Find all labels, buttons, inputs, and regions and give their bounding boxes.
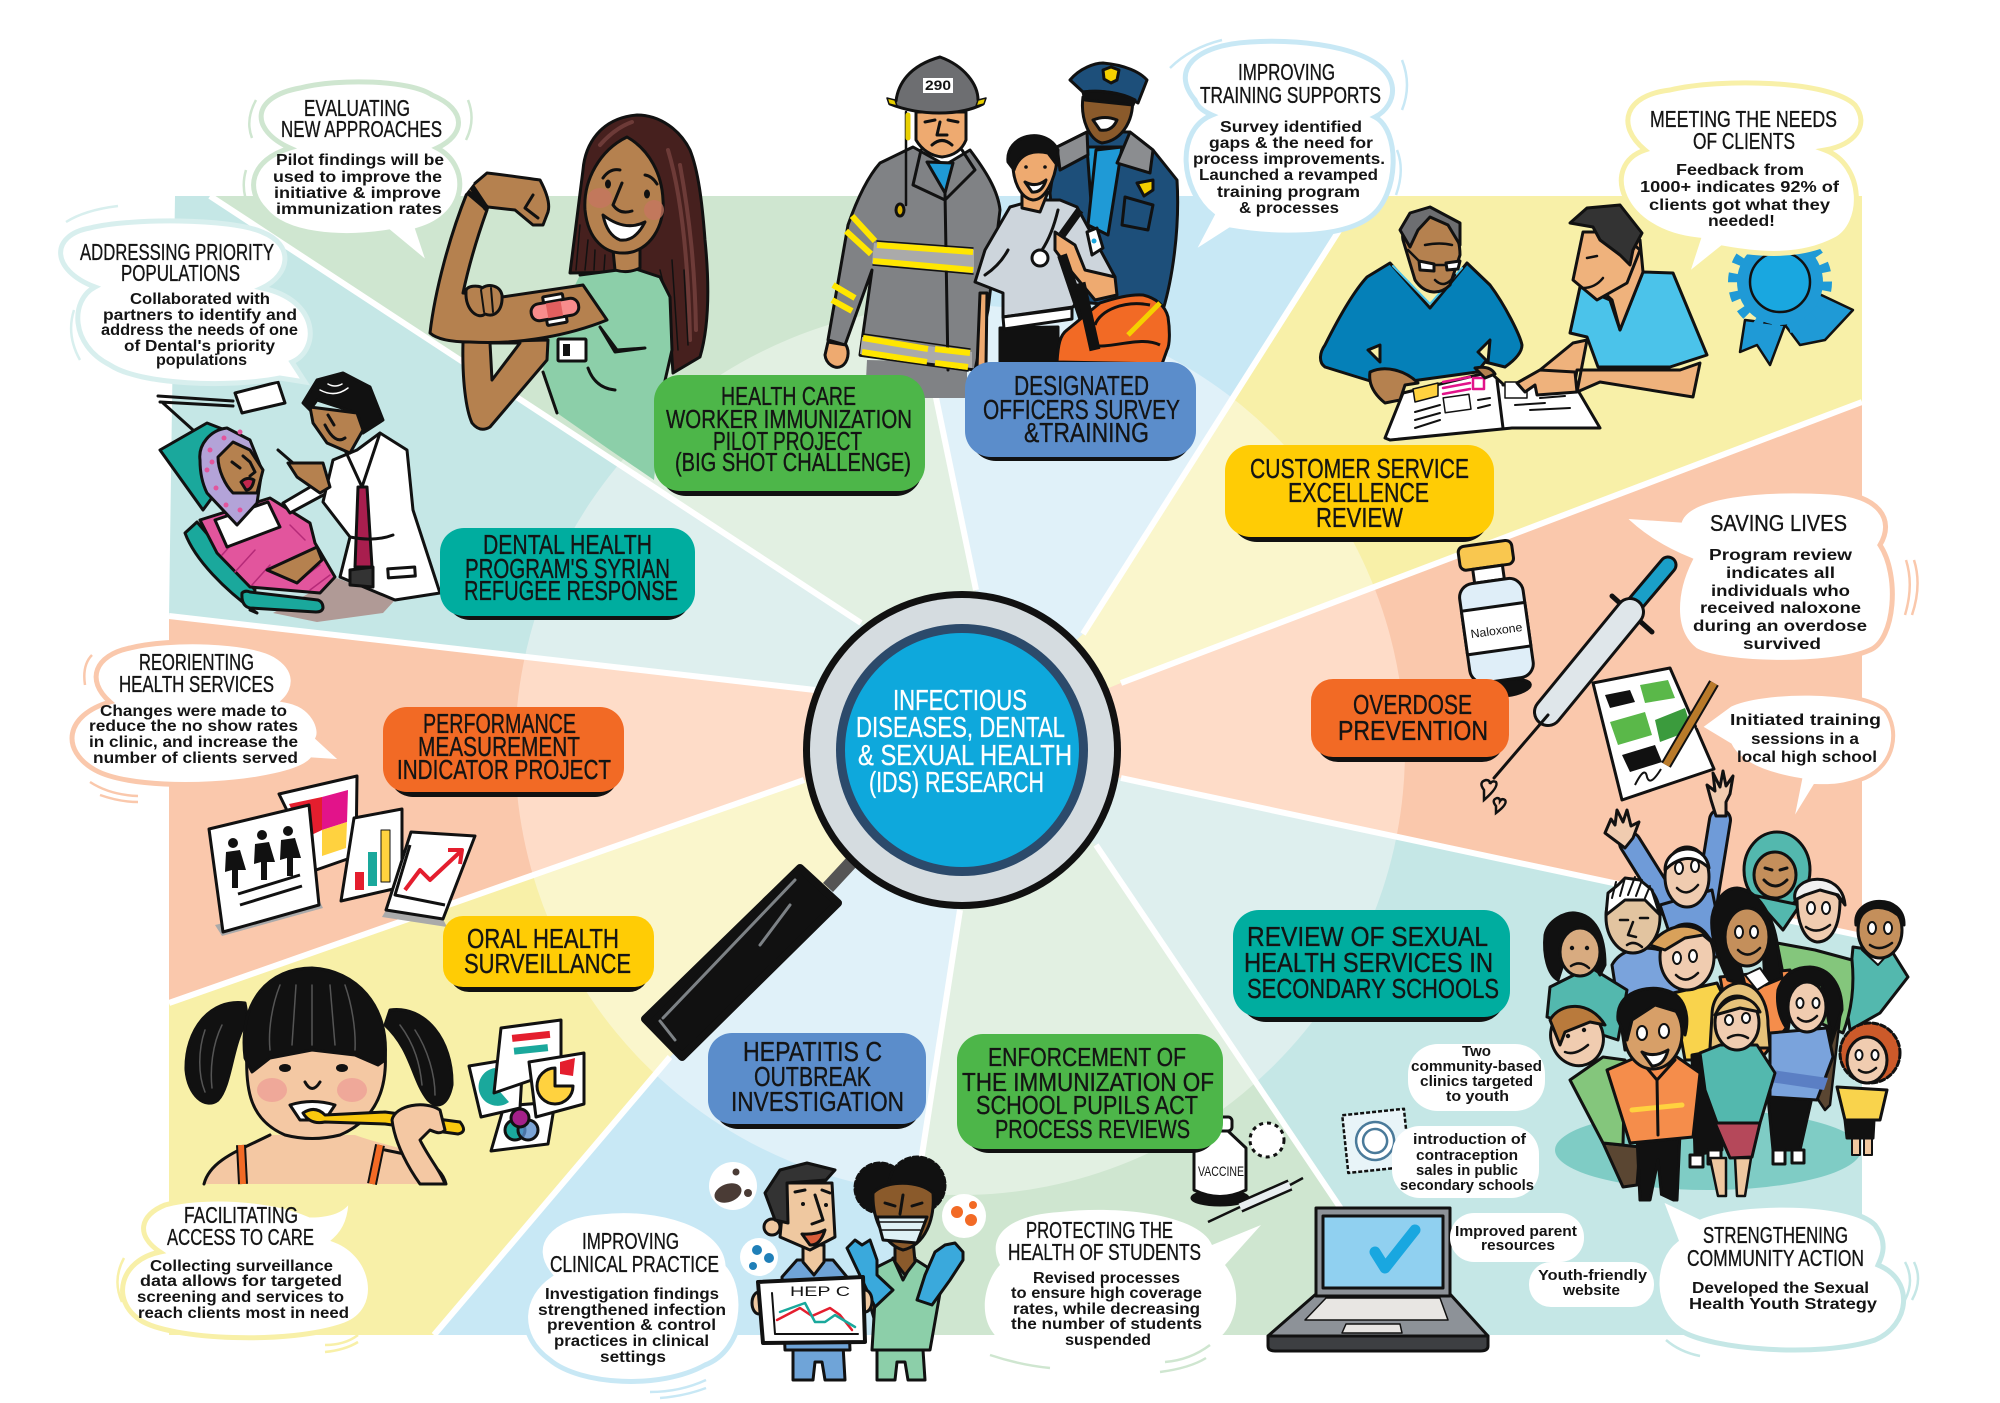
speech bubble: improving clinical practice: Investigation findings [545, 1286, 719, 1303]
speech bubble: strengthening community action: COMMUNITY ACTION [1687, 1245, 1864, 1271]
label: designated officers survey: &TRAINING [1024, 417, 1149, 448]
label: health care worker immunization: WORKER IMMUNIZATION [666, 406, 912, 434]
speech bubble: initiated training sessions: local high school [1737, 749, 1877, 766]
speech bubble: strengthening community action: Developed the Sexual [1692, 1280, 1869, 1297]
magnifying glass [645, 591, 1121, 1057]
speech bubble: meeting the needs of clients: clients got what they [1649, 197, 1830, 214]
speech bubble: addressing priority populations [61, 206, 310, 384]
illustration: oral health survey documents [469, 1020, 584, 1151]
label: review of sexual health services [1233, 910, 1510, 1022]
note: youth-friendly website [1529, 1262, 1654, 1307]
speech bubble: strengthening community action: STRENGTHENING [1703, 1222, 1848, 1248]
note: community-based clinics: community-based [1411, 1059, 1542, 1075]
icon: blue award ribbon [1733, 235, 1853, 365]
note: community-based clinics: to youth [1446, 1089, 1509, 1105]
illustration: signed training document with pencil [1593, 668, 1714, 800]
label: performance measurement [383, 707, 624, 797]
speech bubble: saving lives: survived [1743, 636, 1821, 653]
note: community-based clinics: Two [1462, 1044, 1491, 1060]
speech bubble: improving training supports: Launched a revamped [1199, 167, 1378, 184]
speech bubble: facilitating access to care: screening and services to [137, 1289, 344, 1306]
illustration: paramedic [975, 136, 1117, 367]
speech bubble: protecting the health of students: the number of students [1011, 1316, 1202, 1333]
label: health care worker immunization [654, 375, 925, 496]
speech bubble: improving clinical practice: practices in clinical [554, 1333, 709, 1350]
speech bubble: improving clinical practice: strengthened infection [538, 1302, 726, 1319]
note: community-based clinics: clinics targeted [1420, 1074, 1533, 1090]
illustration: naloxone bottle: Naloxone [1470, 620, 1523, 641]
illustration: hepatitis C health workers with chart: HEP C [790, 1283, 850, 1299]
label: hepatitis C outbreak: INVESTIGATION [731, 1086, 904, 1117]
heading: central title [856, 685, 1072, 799]
label: customer service excellence: EXCELLENCE [1288, 477, 1429, 508]
label: designated officers survey: OFFICERS SURVEY [983, 394, 1180, 425]
speech bubble: initiated training sessions: Initiated training [1730, 712, 1881, 729]
speech bubble: reorienting health services: HEALTH SERVICES [119, 671, 274, 697]
label: enforcement of immunization act: SCHOOL PUPILS ACT [976, 1092, 1198, 1120]
speech bubble: addressing priority populations: ADDRESSING PRIORITY [80, 239, 274, 265]
icon: condom packet [1342, 1109, 1410, 1173]
heading: central title: (IDS) RESEARCH [869, 767, 1044, 799]
speech bubble: reorienting health services: number of clients served [93, 750, 298, 767]
label: enforcement of immunization act: PROCESS REVIEWS [995, 1116, 1190, 1144]
label: enforcement of immunization act: ENFORCEMENT OF [988, 1044, 1186, 1072]
label: customer service excellence: REVIEW [1316, 502, 1403, 533]
illustration: naloxone syringe [1481, 565, 1668, 813]
speech bubble: facilitating access to care: FACILITATING [184, 1202, 298, 1228]
heading: central title: DISEASES, DENTAL [856, 712, 1065, 744]
illustration: nurse flexing arm with bandage [430, 115, 708, 480]
speech bubble: facilitating access to care: Collecting surveillance [150, 1258, 333, 1275]
speech bubble: evaluating new approaches: NEW APPROACHES [281, 116, 442, 142]
illustration: vaccine bottle and syringe: VACCINE [1198, 1163, 1244, 1179]
note: contraception sales [1392, 1126, 1539, 1198]
speech bubble: improving clinical practice: IMPROVING [582, 1228, 679, 1254]
speech bubble: improving training supports [1170, 40, 1407, 255]
speech bubble: improving training supports: & processes [1239, 200, 1339, 217]
label: hepatitis C outbreak [708, 1033, 926, 1129]
label: dental refugee response: REFUGEE RESPONSE [464, 575, 678, 606]
note: improved parent resources [1450, 1213, 1584, 1262]
speech bubble: evaluating new approaches: used to improve the [273, 169, 442, 186]
note: community-based clinics [1408, 1044, 1545, 1111]
label: enforcement of immunization act [957, 1034, 1223, 1153]
speech bubble: addressing priority populations: address the needs of one [101, 322, 298, 339]
speech bubble: protecting the health of students: HEALTH OF STUDENTS [1008, 1239, 1201, 1265]
label: health care worker immunization: (BIG SHOT CHALLENGE) [675, 449, 911, 477]
speech bubble: initiated training sessions: sessions in a [1751, 731, 1859, 748]
speech bubble: evaluating new approaches: Pilot findings will be [276, 152, 444, 169]
label: overdose prevention: PREVENTION [1338, 715, 1488, 746]
speech bubble: initiated training sessions [1700, 694, 1893, 825]
illustration: dentist treating patient [158, 373, 440, 622]
label: health care worker immunization: PILOT PROJECT [713, 428, 862, 456]
speech bubble: evaluating new approaches: EVALUATING [304, 95, 410, 121]
speech bubble: saving lives [1622, 491, 1918, 662]
label: overdose prevention: OVERDOSE [1353, 689, 1472, 720]
speech bubble: reorienting health services: REORIENTING [139, 649, 254, 675]
speech bubble: strengthening community action [1657, 1198, 1918, 1356]
speech bubble: improving clinical practice: settings [600, 1349, 666, 1366]
label: performance measurement: INDICATOR PROJECT [397, 754, 611, 785]
label: dental refugee response: PROGRAM'S SYRIAN [465, 553, 670, 584]
illustration: police officer [1050, 63, 1178, 310]
illustration: laptop with checkmark [1268, 1208, 1488, 1351]
speech bubble: protecting the health of students: PROTECTING THE [1026, 1217, 1173, 1243]
illustration: crowd of community members [1543, 771, 1908, 1200]
label: dental refugee response [440, 528, 695, 620]
speech bubble: improving clinical practice: prevention & control [547, 1317, 716, 1334]
label: oral health surveillance: SURVEILLANCE [464, 948, 631, 979]
label: health care worker immunization: HEALTH CARE [721, 383, 856, 411]
speech bubble: reorienting health services [72, 642, 344, 802]
illustration: firefighter: 290 [925, 77, 951, 93]
label: hepatitis C outbreak: OUTBREAK [754, 1061, 871, 1092]
illustration: orange medical bag [1057, 283, 1169, 364]
speech bubble: improving training supports: Survey identified [1220, 119, 1362, 136]
illustration: vaccine bottle and syringe [1192, 1117, 1303, 1222]
label: hepatitis C outbreak: HEPATITIS C [743, 1036, 882, 1067]
speech bubble: protecting the health of students [985, 1210, 1261, 1372]
speech bubble: addressing priority populations: POPULATIONS [121, 260, 240, 286]
speech bubble: addressing priority populations: of Dental's priority [124, 338, 275, 355]
illustration: performance measurement documents [209, 776, 475, 936]
note: contraception sales: secondary schools [1400, 1178, 1534, 1194]
label: review of sexual health services: HEALTH SERVICES IN [1244, 947, 1493, 978]
speech bubble: meeting the needs of clients [1621, 83, 1861, 277]
panel: radial wedge background [169, 196, 1862, 1335]
speech bubble: improving training supports: process improvements. [1193, 151, 1385, 168]
speech bubble: evaluating new approaches: immunization rates [276, 201, 442, 218]
illustration: girl brushing teeth [186, 968, 464, 1184]
speech bubble: protecting the health of students: to ensure high coverage [1011, 1285, 1202, 1302]
note: improved parent resources: resources [1481, 1238, 1555, 1254]
note: youth-friendly website: Youth-friendly [1538, 1268, 1647, 1284]
label: customer service excellence: CUSTOMER SERVICE [1250, 453, 1469, 484]
speech bubble: improving training supports: training program [1217, 184, 1360, 201]
illustration: two men reading a report [1320, 205, 1707, 440]
speech bubble: meeting the needs of clients: 1000+ indicates 92% of [1640, 179, 1840, 196]
speech bubble: improving clinical practice [526, 1211, 741, 1398]
speech bubble: meeting the needs of clients: OF CLIENTS [1693, 128, 1795, 154]
label: review of sexual health services: REVIEW OF SEXUAL [1247, 921, 1488, 952]
speech bubble: addressing priority populations: Collaborated with [130, 291, 270, 308]
label: enforcement of immunization act: THE IMMUNIZATION OF [962, 1069, 1214, 1097]
speech bubble: facilitating access to care: reach clients most in need [138, 1305, 349, 1322]
speech bubble: strengthening community action: Health Youth Strategy [1689, 1296, 1877, 1313]
note: contraception sales: introduction of [1413, 1132, 1526, 1148]
speech bubble: meeting the needs of clients: Feedback from [1676, 162, 1804, 179]
speech bubble: improving training supports: gaps & the need for [1209, 135, 1373, 152]
speech bubble: meeting the needs of clients: MEETING THE NEEDS [1650, 106, 1837, 132]
label: dental refugee response: DENTAL HEALTH [483, 529, 652, 560]
label: oral health surveillance: ORAL HEALTH [467, 923, 619, 954]
note: contraception sales: contraception [1416, 1148, 1518, 1164]
speech bubble: saving lives: during an overdose [1693, 618, 1867, 635]
speech bubble: reorienting health services: reduce the no show rates [89, 718, 298, 735]
illustration: firefighter [825, 57, 1000, 398]
speech bubble: protecting the health of students: rates, while decreasing [1013, 1301, 1200, 1318]
speech bubble: addressing priority populations: partners to identify and [103, 307, 297, 324]
note: contraception sales: sales in public [1416, 1163, 1518, 1179]
speech bubble: reorienting health services: in clinic, and increase the [89, 734, 298, 751]
label: designated officers survey [965, 362, 1196, 461]
speech bubble: facilitating access to care [117, 1195, 370, 1352]
speech bubble: evaluating new approaches [244, 82, 472, 266]
speech bubble: improving training supports: TRAINING SUPPORTS [1200, 82, 1381, 108]
label: performance measurement: PERFORMANCE [423, 708, 576, 739]
speech bubble: evaluating new approaches: initiative & improve [274, 185, 441, 202]
speech bubble: meeting the needs of clients: needed! [1708, 213, 1775, 230]
speech bubble: saving lives: Program review [1709, 547, 1853, 564]
speech bubble: saving lives: individuals who [1711, 583, 1850, 600]
speech bubble: saving lives: indicates all [1726, 565, 1835, 582]
speech bubble: protecting the health of students: Revised processes [1033, 1270, 1180, 1287]
illustration: hepatitis C health workers with chart [709, 1157, 986, 1380]
label: performance measurement: MEASUREMENT [418, 731, 580, 762]
speech bubble: improving clinical practice: CLINICAL PRACTICE [550, 1251, 719, 1277]
speech bubble: saving lives: received naloxone [1700, 600, 1861, 617]
note: youth-friendly website: website [1562, 1283, 1620, 1299]
speech bubble: reorienting health services: Changes were made to [100, 703, 287, 720]
speech bubble: facilitating access to care: data allows for targeted [140, 1273, 342, 1290]
label: designated officers survey: DESIGNATED [1014, 370, 1149, 401]
speech bubble: saving lives: SAVING LIVES [1710, 510, 1847, 536]
heading: central title: & SEXUAL HEALTH [858, 740, 1072, 772]
label: oral health surveillance [443, 916, 654, 992]
label: overdose prevention [1311, 679, 1509, 762]
label: customer service excellence [1225, 445, 1494, 542]
illustration: naloxone bottle [1453, 539, 1537, 700]
speech bubble: improving training supports: IMPROVING [1238, 59, 1335, 85]
speech bubble: addressing priority populations: populations [156, 352, 247, 369]
heading: central title: INFECTIOUS [893, 685, 1027, 717]
label: review of sexual health services: SECONDARY SCHOOLS [1247, 973, 1499, 1004]
speech bubble: facilitating access to care: ACCESS TO CARE [167, 1224, 314, 1250]
speech bubble: protecting the health of students: suspended [1065, 1332, 1151, 1349]
note: improved parent resources: Improved parent [1455, 1224, 1577, 1240]
